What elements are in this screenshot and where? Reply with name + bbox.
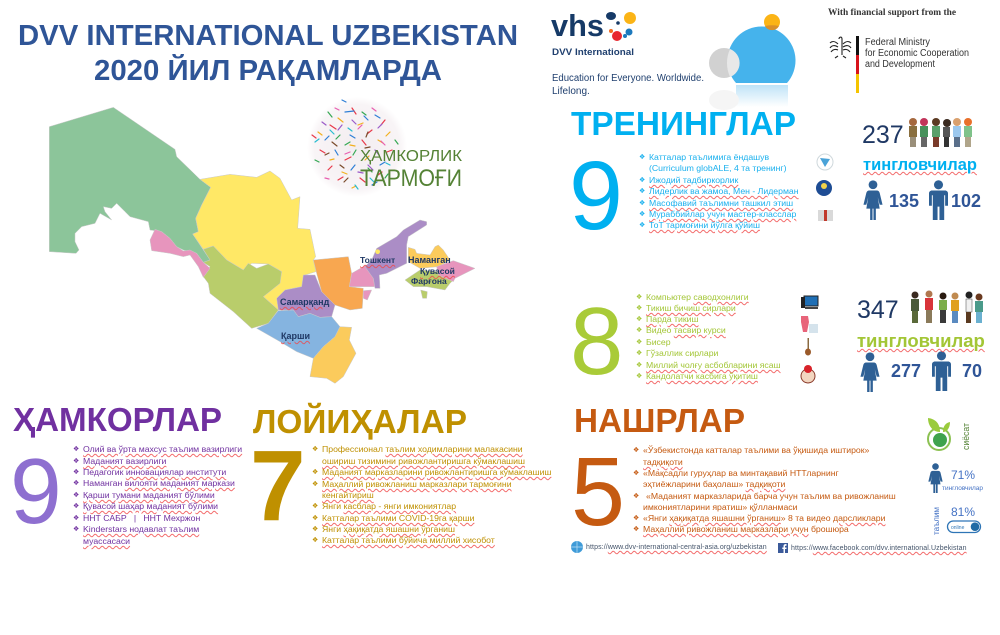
number: 277: 277 (891, 361, 921, 381)
label: participants: тингловчилар (857, 330, 985, 351)
icon: dutar instrument (805, 338, 811, 356)
list: projects: кенгайтириш (322, 490, 374, 500)
list: publications: «Ўзбекистонда катталар таълими ва ўқишида иштирок» (643, 445, 869, 455)
list: trainings (640, 152, 799, 234)
logo: federal ministry: With financial support from the (828, 8, 956, 18)
icon: computer (801, 296, 818, 309)
icon: female participants (860, 352, 880, 392)
text: Самарқанд (280, 297, 329, 307)
list: trainings: ТоТ тармоғини йўлга қўйиш (649, 220, 760, 230)
list: publications: «Мақсадли гуруҳлар ва минтақавий НТТларнинг (643, 468, 839, 478)
list: partners: Олий ва ўрта махсус таълим вазирлиги (83, 444, 242, 454)
panel: map of Uzbekistan (49, 107, 475, 384)
panel: map of Uzbekistan: Наманган (408, 255, 451, 265)
icon: globe website (571, 541, 583, 553)
icon: blue circle graphic (709, 14, 796, 110)
icon: female trainee (928, 463, 943, 493)
icon: online toggle (948, 521, 980, 532)
heading: partners: ҲАМКОРЛАР (13, 401, 222, 438)
number: 5 publications: 5 (571, 437, 625, 546)
list: courses: Бисер (646, 337, 671, 347)
text: Қарши (281, 331, 310, 341)
panel: publications (571, 402, 984, 556)
list: projects: Маданият марказларини ривожлантиришга кўмаклашиш (322, 467, 551, 477)
list: partners: Қувасой шаҳар маданият бўлими (83, 501, 218, 511)
list: projects: Катталар таълими COVID-19га қарши (322, 513, 474, 523)
number: 102: 102 (951, 191, 981, 211)
stat: 237: 237 (862, 121, 904, 149)
panel: map of Uzbekistan: Қувасой (420, 266, 455, 276)
panel: map of Uzbekistan: Тошкент (360, 255, 395, 265)
icon: group of trainees (909, 118, 972, 147)
logo: training partner 1 (817, 154, 833, 170)
logo: vhs DVV International: vhs (551, 8, 604, 43)
list: courses: Кандолатчи касбига ўқитиш (646, 371, 758, 381)
list: partners: ННТ САБР | ННТ Мехржон (83, 513, 200, 523)
list: publications: «Янги ҳақиқатда яшашни ўрганиш» 8 та видео дарсликлари (643, 513, 885, 523)
panel: partners (10, 401, 242, 550)
list: courses: Гўзаллик сирлари (646, 348, 718, 358)
logo: vhs DVV International (551, 8, 704, 97)
logo: training partner 2 (816, 180, 832, 196)
icon: male participants (932, 351, 951, 391)
network caption: ҲАМКОРЛИК (360, 148, 463, 165)
heading: publications: НАШРЛАР (574, 402, 745, 439)
logo: federal ministry: for Economic Cooperation (865, 48, 969, 59)
list: trainings: Катталар таълимига ёндашув (649, 152, 769, 162)
title: DVV INTERNATIONAL UZBEKISTAN (18, 20, 518, 52)
logo: federal ministry: and Development (865, 59, 935, 70)
icon: male trainees (929, 180, 948, 220)
heading: trainings: ТРЕНИНГЛАР (571, 105, 796, 142)
title: 2020 ЙИЛ РАҚАМЛАРДА (94, 53, 442, 87)
list: courses: Видео тасвир курси (646, 325, 726, 335)
list: projects: Янги касблар - янги имкониятлар (322, 501, 456, 511)
list: publications (634, 445, 896, 538)
list: partners: Педагогик инновациялар институти (83, 467, 226, 477)
number: 7 projects: 7 (250, 430, 306, 542)
label: trainees: тингловчилар (863, 156, 977, 174)
stat: 81%: 81% (951, 505, 975, 519)
list: partners: Kinderstars нодавлат таълим (83, 524, 199, 534)
number: 70: 70 (962, 361, 982, 381)
panel: trainings (569, 105, 981, 250)
logo: vhs DVV International: DVV International (552, 47, 634, 58)
logo: federal ministry: Federal Ministry (865, 37, 930, 48)
list: publications: тадқиқоти (643, 457, 683, 467)
list: publications: эҳтиёжларини баҳолаш» тадқиқоти (643, 479, 785, 489)
icon: green globe (928, 418, 950, 450)
panel: projects (250, 402, 552, 548)
stat: 347: 347 (857, 296, 899, 324)
list: trainings: Масофавий таълимни ташкил этиш (649, 198, 793, 208)
list: trainings: Лидерлик ва жамоа, Мен - Лидерман (649, 186, 799, 196)
panel: map of Uzbekistan: Фарғона (411, 276, 447, 286)
list: publications: «Маданият марказларида барча учун таълим ва ривожланиш (646, 491, 896, 501)
link: website: https://www.dvv-international-central-asia.org/uzbekistan (586, 544, 767, 551)
list: courses: Компьютер саводхонлиги (646, 292, 749, 302)
list: publications: Маҳаллий ривожланиш марказлари учун брошюра (643, 524, 849, 534)
logo: vhs DVV International: Education for Everyone. Worldwide. (552, 73, 704, 84)
logo: federal ministry (828, 8, 969, 93)
list: projects: Янги ҳақиқатда яшашни ўрганиш (322, 524, 455, 534)
icon: facebook (778, 543, 788, 553)
icon: cake (801, 365, 815, 383)
number: 9 trainings: 9 (569, 141, 623, 250)
panel: courses (570, 288, 985, 395)
list: partners: Наманган вилояти маданият маркази (83, 478, 235, 488)
network caption: ТАРМОҒИ (360, 165, 462, 192)
label: trainees small: тингловчилар (942, 486, 984, 492)
list: publications: имкониятларини яратиш» қўлланмаси (643, 502, 797, 512)
list: partners: Қарши тумани маданият бўлими (83, 490, 215, 500)
title (18, 20, 518, 87)
list: projects: ошириш тизимини ривожлантиришга кўмаклашиш (322, 456, 525, 466)
list: courses: Парда тикиш (646, 314, 698, 324)
heading: projects: ЛОЙИҲАЛАР (253, 402, 467, 440)
icon: online toggle: online (951, 525, 965, 531)
list: courses (636, 292, 781, 384)
list: partners (74, 444, 242, 550)
icon: female trainees (863, 180, 883, 220)
list: projects (312, 444, 552, 548)
number: 8 courses: 8 (570, 288, 623, 395)
list: projects: Профессионал таълим ходимларини малакасини (322, 444, 523, 454)
list: trainings: (Curriculum globALE, 4 та тренинг) (649, 163, 786, 173)
list: trainings: Мураббийлар учун мастер-класслар (649, 209, 796, 219)
list: partners: Маданият вазирлиги (83, 456, 166, 466)
network caption (360, 148, 463, 192)
icon: group of course participants (911, 290, 983, 323)
list: courses: Миллий чолғу асбобларини ясаш (646, 360, 781, 370)
list: trainings: Ижодий тадбиркорлик (649, 175, 738, 185)
number: 9 partners: 9 (10, 439, 62, 543)
logo: vhs DVV International: Lifelong. (552, 86, 590, 97)
label: education: таълим (931, 507, 941, 535)
list: partners: муассасаси (83, 536, 130, 546)
label: policy: сиёсат (961, 423, 971, 450)
network graphic: hamkorlik tarmogi (311, 99, 463, 192)
number: 135: 135 (889, 191, 919, 211)
icon: sewing (801, 316, 818, 333)
link: facebook: https://www.facebook.com/dvv.international.Uzbekistan (791, 545, 967, 552)
list: projects: Катталар таълими бўйича миллий хисобот (322, 535, 495, 545)
logo: training partner 3 (818, 210, 833, 221)
stat: 71%: 71% (951, 468, 975, 482)
list: courses: Тикиш бичиш сирлари (646, 303, 736, 313)
list: projects: Маҳаллий ривожланиш марказлари тармоғини (322, 479, 512, 489)
